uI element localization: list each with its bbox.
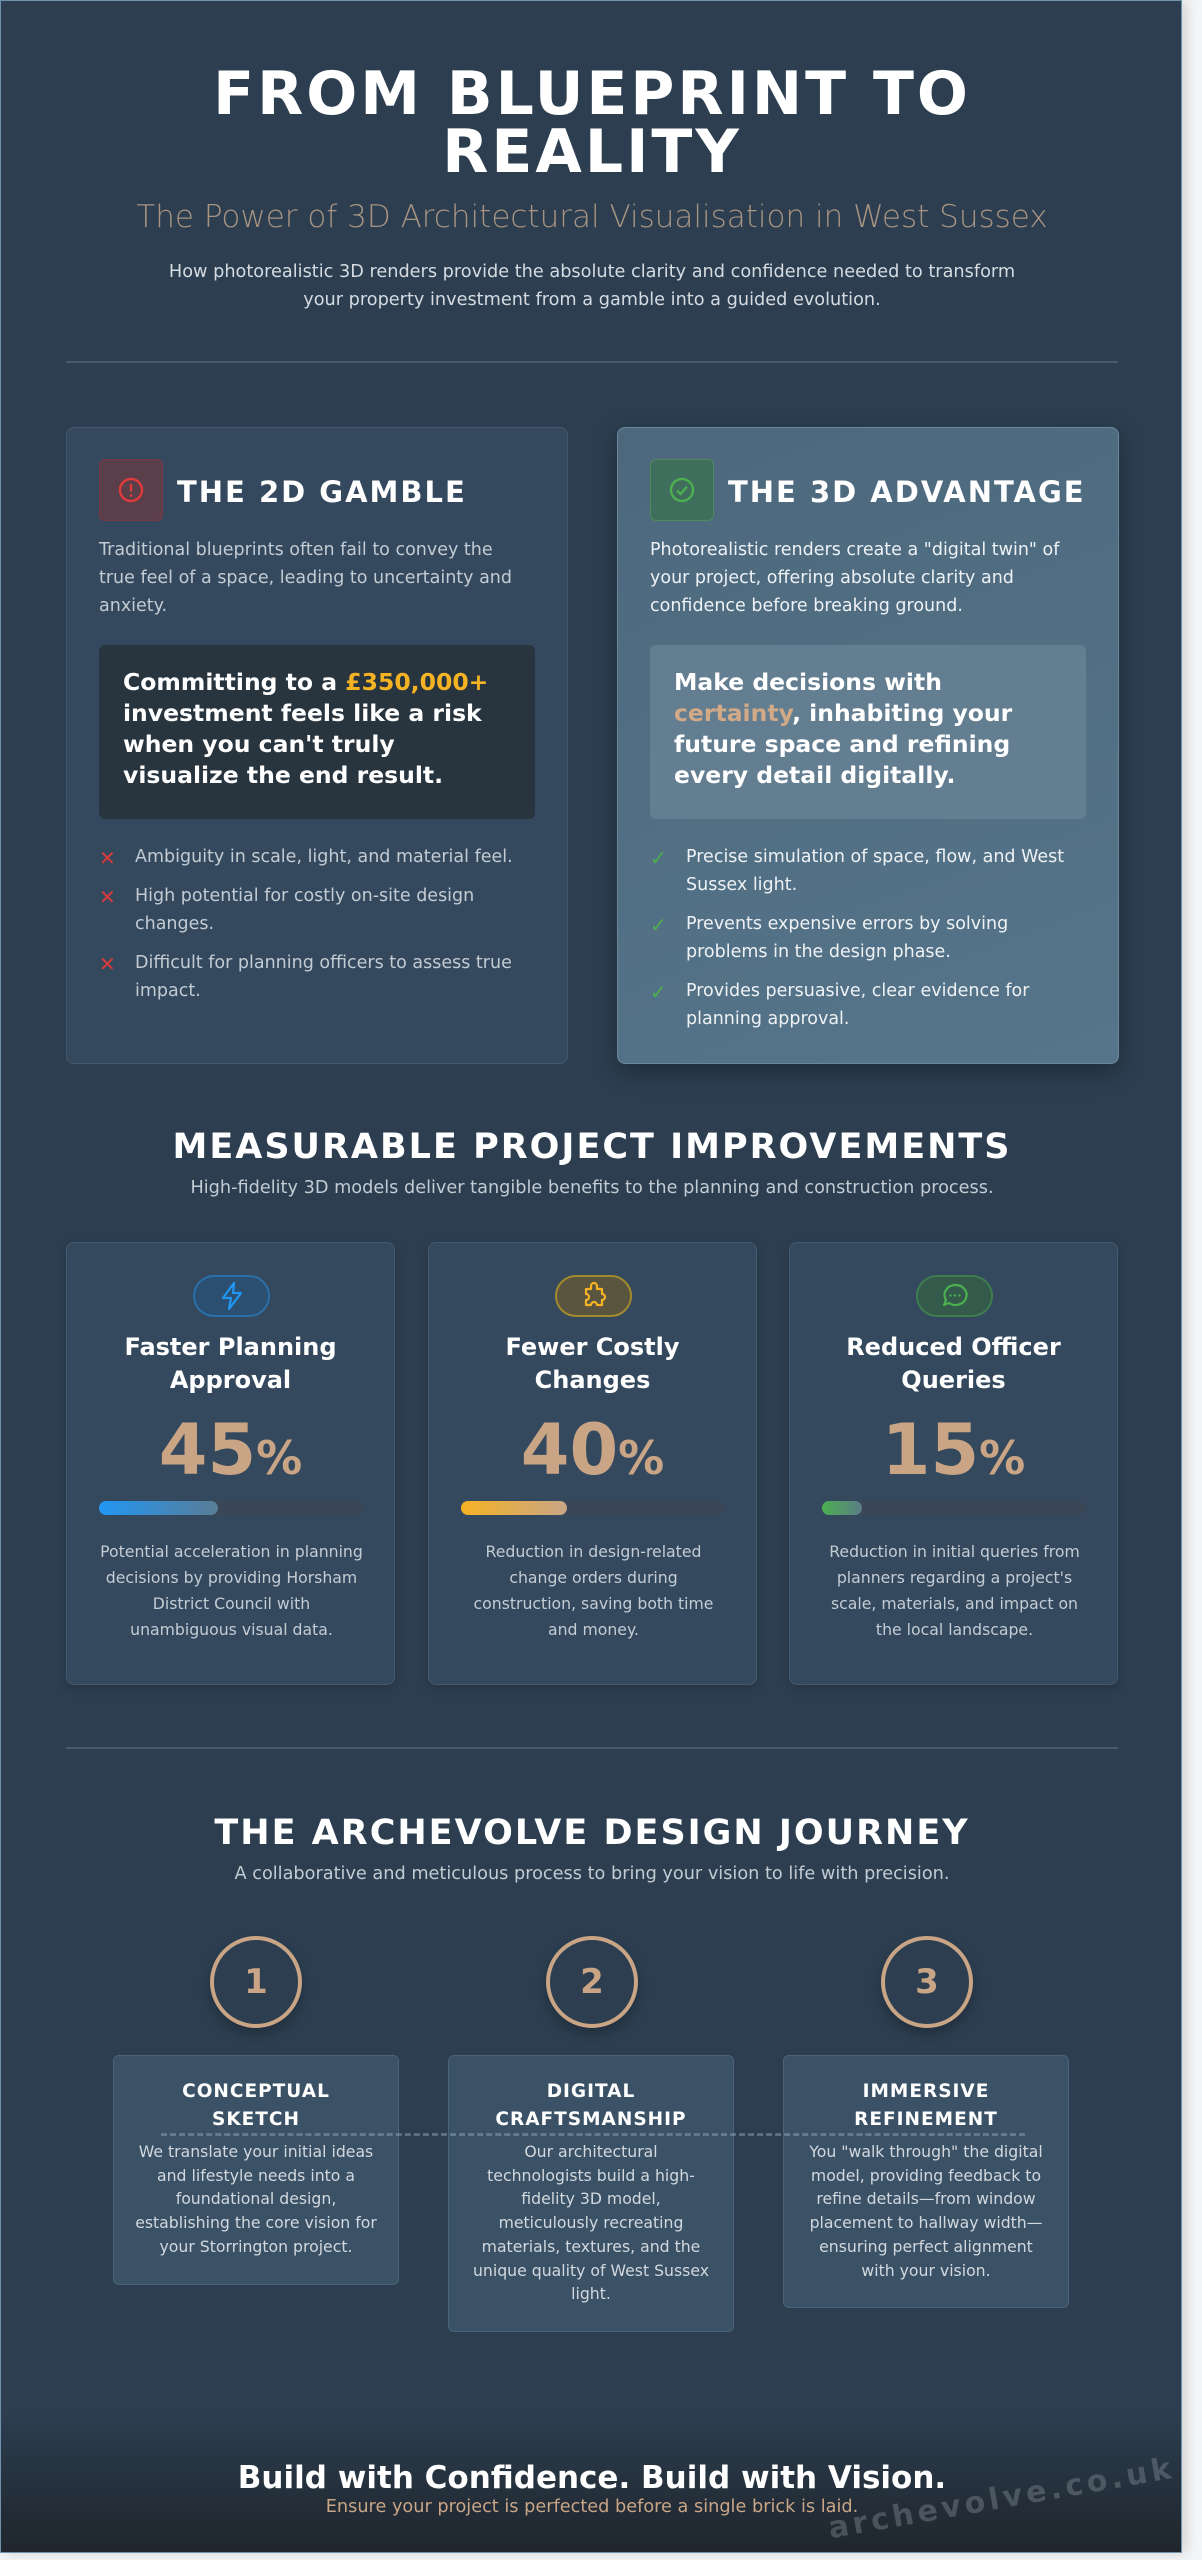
callout: Committing to a £350,000+ investment feels like a risk when you can't truly visualize the end result. [123, 668, 488, 789]
stat 15%: 15% [882, 1409, 1025, 1491]
intro text: your property investment from a gamble into a guided evolution. [303, 290, 881, 310]
step circle 2 [546, 1936, 638, 2028]
icon: chat [916, 1275, 993, 1317]
heading: measurable improvements: MEASURABLE PROJECT IMPROVEMENTS [172, 1127, 1011, 1167]
card: faster planning [66, 1242, 395, 1685]
step 2 box: meticulously recreating [499, 2213, 683, 2232]
step 2 box: fidelity 3D model, [521, 2189, 661, 2208]
footer [1, 2411, 1183, 2554]
card: faster planning: Faster Planning [124, 1333, 337, 1361]
list: benefits: Prevents expensive errors by solving problems in the design phase. [686, 914, 1008, 962]
description: Photorealistic renders create a "digital twin" of your project, offering absolute clarity and confidence before breaking ground. [650, 540, 1059, 616]
icon: puzzle [555, 1275, 632, 1317]
card: fewer changes: Reduction in design-related change orders during construction, saving both time and money. [474, 1542, 713, 1639]
footer tagline: Ensure your project is perfected before a single brick is laid. [326, 2497, 858, 2517]
card: reduced queries [789, 1242, 1118, 1685]
panel: 2D gamble [66, 427, 568, 1064]
intro text [169, 262, 1015, 310]
icon: check [650, 459, 714, 521]
list: problems: ✕ [99, 885, 116, 909]
list: benefits: ✓ [650, 980, 667, 1004]
card: reduced queries: Reduction in initial queries from planners regarding a project's scale, materials, and impact on the local landscape. [829, 1542, 1080, 1639]
intro text: How photorealistic 3D renders provide the absolute clarity and confidence needed to transform [169, 262, 1015, 282]
bar 40% [461, 1501, 725, 1515]
card: fewer changes [428, 1242, 757, 1685]
subtitle: The Power of 3D Architectural Visualisation in West Sussex [136, 199, 1048, 235]
step 1 box: We translate your initial ideas and lifestyle needs into a foundational design, establishing the core vision for your Storrington project. [135, 2142, 377, 2256]
list: problems [99, 846, 513, 1001]
watermark: archevolve.co.uk [826, 2451, 1178, 2546]
step 2 box: CRAFTSMANSHIP [495, 2109, 687, 2130]
step 2 box [448, 2055, 734, 2332]
subheading: High-fidelity 3D models deliver tangible benefits to the planning and construction process. [190, 1178, 994, 1198]
heading: design journey: THE ARCHEVOLVE DESIGN JOURNEY [214, 1813, 970, 1853]
step 2 box: technologists build a high- [487, 2166, 695, 2185]
subheading: A collaborative and meticulous process to bring your vision to life with precision. [234, 1864, 950, 1884]
step 1 box: CONCEPTUAL [182, 2081, 330, 2102]
title: FROM BLUEPRINT TO [213, 59, 971, 129]
card: faster planning: Potential acceleration in planning decisions by providing Horsham District Council with unambiguous visual data. [100, 1542, 363, 1639]
list: problems: ✕ [99, 952, 116, 976]
list: problems: Difficult for planning officers to assess true impact. [135, 953, 512, 1001]
step 2 box: DIGITAL [547, 2081, 635, 2102]
footer heading: Build with Confidence. Build with Vision. [238, 2460, 946, 2496]
card: fewer changes: Changes [535, 1366, 650, 1394]
step circle 2: 2 [580, 1962, 604, 2002]
stat 45%: 45% [159, 1409, 302, 1491]
title [213, 59, 971, 187]
bar 45% [99, 1501, 363, 1515]
list: benefits: Provides persuasive, clear evidence for planning approval. [686, 981, 1029, 1029]
list: benefits: Precise simulation of space, flow, and West Sussex light. [686, 847, 1064, 895]
card: reduced queries: Queries [901, 1366, 1006, 1394]
step 1 box: SKETCH [212, 2109, 300, 2130]
heading: THE 2D GAMBLE [177, 475, 467, 509]
card: reduced queries: Reduced Officer [846, 1333, 1061, 1361]
step 3 box: IMMERSIVE [863, 2081, 989, 2102]
step circle 3 [881, 1936, 973, 2028]
list: problems: High potential for costly on-site design changes. [135, 886, 474, 934]
step 2 box: unique quality of West Sussex [473, 2261, 709, 2280]
step circle 1 [210, 1936, 302, 2028]
step 1 box [113, 2055, 399, 2285]
step 3 box: REFINEMENT [854, 2109, 998, 2130]
step 3 box: You "walk through" the digital model, providing feedback to refine details—from window placement to hallway width—ensuring perfect alignment with your vision. [809, 2142, 1043, 2280]
callout: Make decisions with certainty, inhabiting your future space and refining every detail digitally. [674, 668, 1012, 789]
description: Traditional blueprints often fail to convey the true feel of a space, leading to uncertainty and anxiety. [99, 540, 512, 616]
title: REALITY [442, 117, 742, 187]
step circle 3: 3 [915, 1962, 939, 2002]
panel: 3D advantage [617, 427, 1119, 1064]
bar 15% [822, 1501, 1086, 1515]
list: problems: ✕ [99, 846, 116, 870]
callout [650, 645, 1086, 819]
list: benefits: ✓ [650, 846, 667, 870]
stat 40%: 40% [521, 1409, 664, 1491]
step 3 box [783, 2055, 1069, 2308]
step circle 1: 1 [244, 1962, 268, 2002]
list: problems: Ambiguity in scale, light, and material feel. [135, 847, 513, 867]
list: benefits: ✓ [650, 913, 667, 937]
icon: lightning [193, 1275, 270, 1317]
step 2 box: materials, textures, and the [482, 2237, 700, 2256]
list: benefits [650, 846, 1064, 1029]
card: faster planning: Approval [170, 1366, 291, 1394]
step 2 box: Our architectural [524, 2142, 658, 2161]
connector dashed line [161, 2133, 1025, 2136]
card: fewer changes: Fewer Costly [505, 1333, 680, 1361]
callout [99, 645, 535, 819]
icon: warning [99, 459, 163, 521]
heading: THE 3D ADVANTAGE [728, 475, 1086, 509]
step 2 box: light. [571, 2284, 611, 2303]
